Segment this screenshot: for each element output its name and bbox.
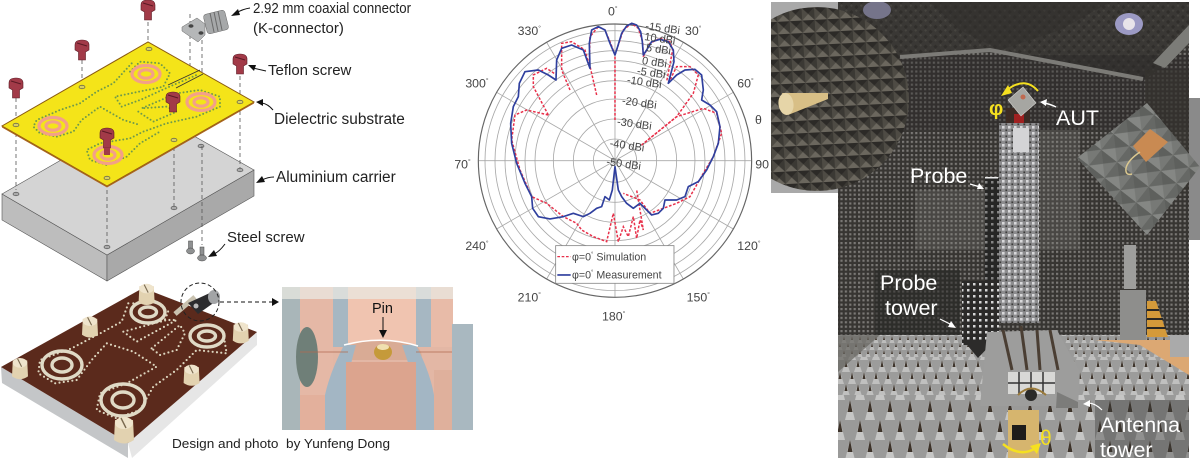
angle labels: ° [758,239,761,247]
close-up micrograph [282,287,473,430]
angle labels: 210 [518,291,538,305]
antenna tower [980,326,1080,458]
radial dBi labels: -20 dBi [621,95,657,112]
label: dielectric substrate: Dielectric substrate [274,111,405,128]
aluminium carrier [2,110,254,281]
angle labels [454,5,769,324]
polar grid [478,24,752,297]
label: Antenna: Antenna [1100,413,1180,437]
pink pad and gaps [350,341,422,360]
antenna under test [1008,87,1036,116]
radial dBi labels [606,20,681,173]
radial dBi labels: -10 dBi [626,74,662,91]
radial dBi labels: 5 dBi [645,42,672,57]
antenna board [1133,129,1168,162]
angle labels: 30 [685,24,699,38]
angle labels: 90 [755,157,769,171]
brown substrate [1,288,257,443]
angle labels: ° [538,24,541,32]
icon: Teflon screws [9,0,247,155]
arrow: theta rotation [1003,443,1041,454]
label: steel screw: Steel screw [227,229,305,246]
label: theta: θ [1040,427,1052,450]
probe tower [962,108,1039,358]
inset: antenna on absorber [1077,103,1200,235]
arrow: antenna tower [1083,400,1102,410]
panel: photo of fabricated antenna [1,283,473,458]
icon: horn probe [777,92,828,116]
label: connector: 2.92 mm coaxial connector [253,0,411,17]
angle labels: ° [538,291,541,299]
legend: Simulation [593,251,646,263]
arrow: AUT [1040,99,1056,107]
radial dBi labels: -5 dBi [636,65,666,81]
angle labels: 180 [602,310,623,324]
label: K-connector: (K-connector) [253,20,344,37]
label: aluminium carrier: Aluminium carrier [276,169,396,186]
angle labels: 120 [737,239,758,253]
chamber floor [838,335,1189,458]
legend: φ=0 [572,251,591,263]
angle labels: 70 [454,157,468,171]
angle labels: ° [615,5,618,13]
chamber walls [838,45,1189,350]
arrow: probe tower [940,319,956,328]
arrow: phi rotation [1001,83,1038,96]
rings [42,301,224,416]
panel: polar radiation pattern [454,5,769,324]
panel: grey backing right [1189,98,1200,240]
angle labels: ° [751,76,754,84]
coaxial cable [1126,152,1140,174]
caption: Design and photo by Yunfeng Dong [172,436,390,451]
via traces [38,300,227,418]
angle labels: 330 [518,24,538,38]
label: phi: φ [989,98,1003,120]
angle labels: ° [486,239,489,247]
radial dBi labels: -40 dBi [609,138,645,154]
legend: φ=0 [572,269,591,281]
nylon screws [12,284,249,444]
label: Probe: Probe [910,164,967,188]
board edge [1,332,257,458]
side absorber blocks and stairs [1120,245,1189,357]
radiating ring elements [39,66,215,164]
ceiling ledge [900,50,1143,79]
legend [556,246,674,283]
label: Probe tower: Probe [880,271,937,295]
angle labels: ° [623,310,626,318]
angle labels: ° [468,157,471,165]
label: AUT: AUT [1056,106,1099,130]
panel: exploded assembly diagram [2,0,411,281]
connector on photo [175,290,220,314]
radial dBi labels: -50 dBi [606,156,642,173]
arrow: pin [379,317,387,338]
angle labels: 0 [608,5,615,19]
inset: absorber with horn probe [771,2,909,193]
angle labels: ° [699,24,702,32]
legend: ° [591,270,594,276]
legend: Measurement [593,269,662,281]
angle labels: θ [755,113,762,127]
series: simulation [512,23,722,242]
chamber ceiling [838,1,1189,82]
radial dBi labels: 10 dBi [644,31,676,47]
radial dBi labels: -30 dBi [616,116,652,133]
angle labels: ° [486,76,489,84]
label: tower: tower [885,296,938,320]
series: measurement [511,23,720,219]
angle labels: 300 [465,76,486,90]
label: Pin: Pin [372,301,393,317]
angle labels: 60 [737,76,751,90]
arrow: Probe [970,183,984,189]
alignment dashed lines [16,14,240,245]
legend: ° [591,252,594,258]
dashed circle callout [181,283,219,321]
angle labels: 150 [687,291,707,305]
radial dBi labels: 0 dBi [641,55,668,70]
leader arrows [208,8,274,257]
panel: anechoic chamber photo [838,1,1189,458]
dielectric substrate board [2,42,254,188]
icon: 2.92 mm coaxial connector [182,10,229,42]
radial dBi labels: -15 dBi [645,20,681,37]
dashed arrow to close-up [220,298,279,306]
label: Teflon screw: Teflon screw [268,62,352,79]
angle labels: 240 [465,239,486,253]
angle labels: ° [707,291,710,299]
icon: steel screws [186,241,206,261]
